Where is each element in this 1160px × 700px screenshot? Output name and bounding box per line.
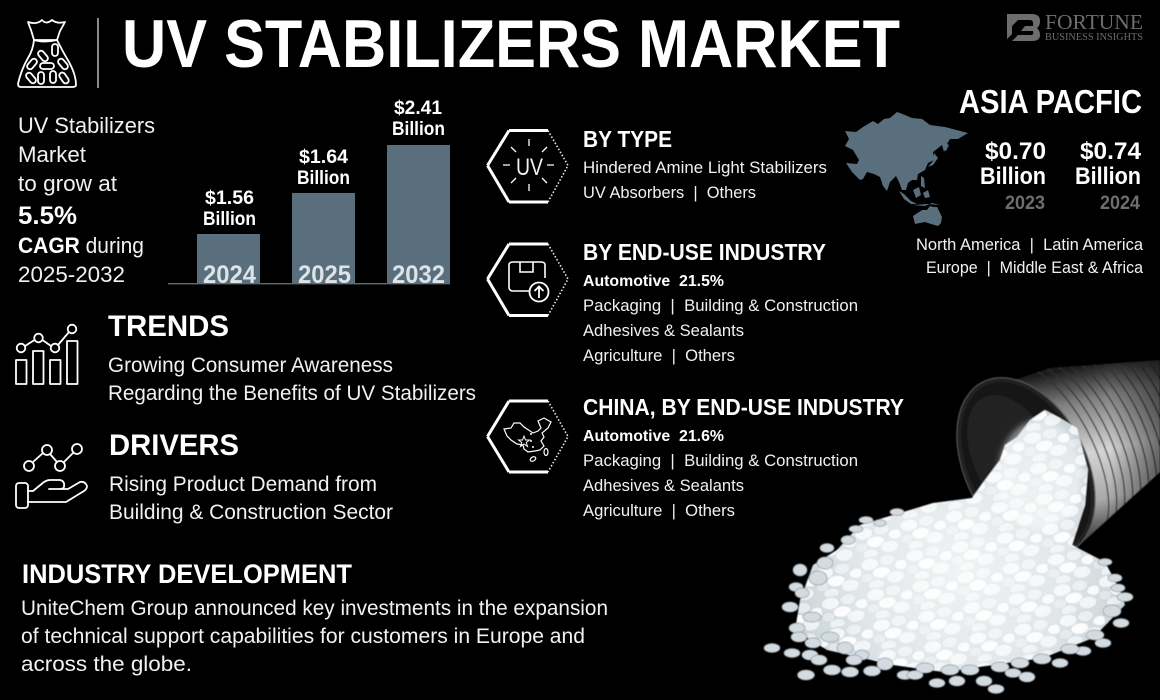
pellet pile [764, 410, 1133, 694]
stat: 2023 value: $0.70 [985, 138, 1046, 165]
text block: trends: Regarding the Benefits of UV Stabilizers [108, 382, 476, 405]
bar 2032: $2.41 [394, 98, 442, 119]
logo: Fortune Business Insights: FORTUNE [1045, 10, 1143, 34]
text block: by end-use industry [583, 273, 858, 365]
glass cylinder [956, 360, 1160, 548]
heading: trends: TRENDS [108, 310, 229, 343]
stat: 2023 value [980, 138, 1046, 214]
bar 2025 [292, 147, 355, 289]
logo: Fortune Business Insights [1007, 10, 1143, 43]
text block: by type [583, 158, 827, 202]
bar chart: market size [168, 98, 450, 289]
logo: Fortune Business Insights: BUSINESS INSIGHTS [1045, 32, 1143, 43]
text block: China by end-use industry: Packaging | Building & Construction [583, 451, 858, 470]
text block: CAGR summary: CAGR during [18, 233, 144, 258]
text block: trends: Growing Consumer Awareness [108, 354, 393, 377]
text block: CAGR summary: 5.5% [18, 202, 77, 230]
bar 2024: $1.56 [205, 188, 254, 209]
text block: CAGR summary: Market [18, 142, 86, 167]
text block: by end-use industry: Automotive 21.5% [583, 273, 724, 290]
text block: CAGR summary [18, 113, 155, 287]
bar 2024 [197, 188, 260, 289]
bar 2032: Billion [392, 119, 445, 140]
stat: 2024 value: $0.74 [1080, 138, 1142, 165]
icon: China map hexagon [488, 401, 568, 472]
text block: drivers: Building & Construction Sector [109, 501, 393, 524]
icon: drivers hand with chart [16, 444, 87, 508]
text block: China by end-use industry: Adhesives & Sealants [583, 476, 744, 495]
text block: CAGR summary: to grow at [18, 171, 117, 196]
text block: trends [108, 354, 476, 405]
bar 2032: 2032 [392, 261, 445, 289]
heading: by type: BY TYPE [583, 126, 672, 152]
heading: Asia Pacific: ASIA PACFIC [959, 83, 1142, 120]
text block: other regions [916, 235, 1144, 277]
heading: by end-use industry: BY END-USE INDUSTRY [583, 239, 826, 265]
title divider [97, 18, 99, 88]
text block: drivers: Rising Product Demand from [109, 473, 377, 496]
text block: other regions: North America | Latin America [916, 235, 1144, 254]
bar 2025: 2025 [298, 261, 351, 289]
text block: by type: Hindered Amine Light Stabilizers [583, 158, 827, 177]
icon: UV hexagon: UV [516, 154, 543, 181]
text block: by end-use industry: Packaging | Building & Construction [583, 296, 858, 315]
icon: trends chart [16, 325, 78, 384]
text block: industry development: across the globe. [21, 653, 192, 676]
photo: glass of spilled white pellets [763, 360, 1160, 695]
stat: 2024 value: Billion [1075, 163, 1141, 190]
text block: CAGR summary: UV Stabilizers [18, 113, 155, 138]
text block: other regions: Europe | Middle East & Africa [926, 258, 1144, 277]
bar 2025: Billion [297, 168, 350, 189]
text block: China by end-use industry [583, 428, 858, 520]
stat: 2024 value: 2024 [1100, 193, 1140, 214]
bar 2025: $1.64 [299, 147, 348, 168]
stat: 2024 value [1075, 138, 1142, 214]
heading: drivers: DRIVERS [109, 429, 239, 462]
text block: industry development: of technical support capabilities for customers in Europe and [21, 625, 585, 648]
bar 2024: 2024 [203, 261, 256, 289]
bar 2024: Billion [203, 209, 256, 230]
bar 2032 [387, 98, 450, 289]
text block: China by end-use industry: Agriculture | Others [583, 501, 735, 520]
text block: industry development: UniteChem Group announced key investments in the expansion [21, 597, 608, 620]
text block: by type: UV Absorbers | Others [583, 183, 756, 202]
title: UV STABILIZERS MARKET [122, 6, 900, 82]
text block: CAGR summary: 2025-2032 [18, 262, 125, 287]
icon: sack of pellets [18, 20, 76, 87]
text block: by end-use industry: Agriculture | Others [583, 346, 735, 365]
text block: by end-use industry: Adhesives & Sealants [583, 321, 744, 340]
text block: industry development [21, 597, 608, 676]
text block: China by end-use industry: Automotive 21.6% [583, 428, 724, 445]
icon: Asia Pacific map [845, 112, 968, 226]
text block: drivers [109, 473, 393, 524]
heading: China by end-use industry: CHINA, BY END-USE INDUSTRY [583, 394, 904, 420]
stat: 2023 value: 2023 [1005, 193, 1045, 214]
icon: UV hexagon [488, 130, 568, 202]
stat: 2023 value: Billion [980, 163, 1046, 190]
heading: industry development: INDUSTRY DEVELOPMENT [22, 559, 352, 589]
icon: package hexagon [488, 244, 568, 316]
